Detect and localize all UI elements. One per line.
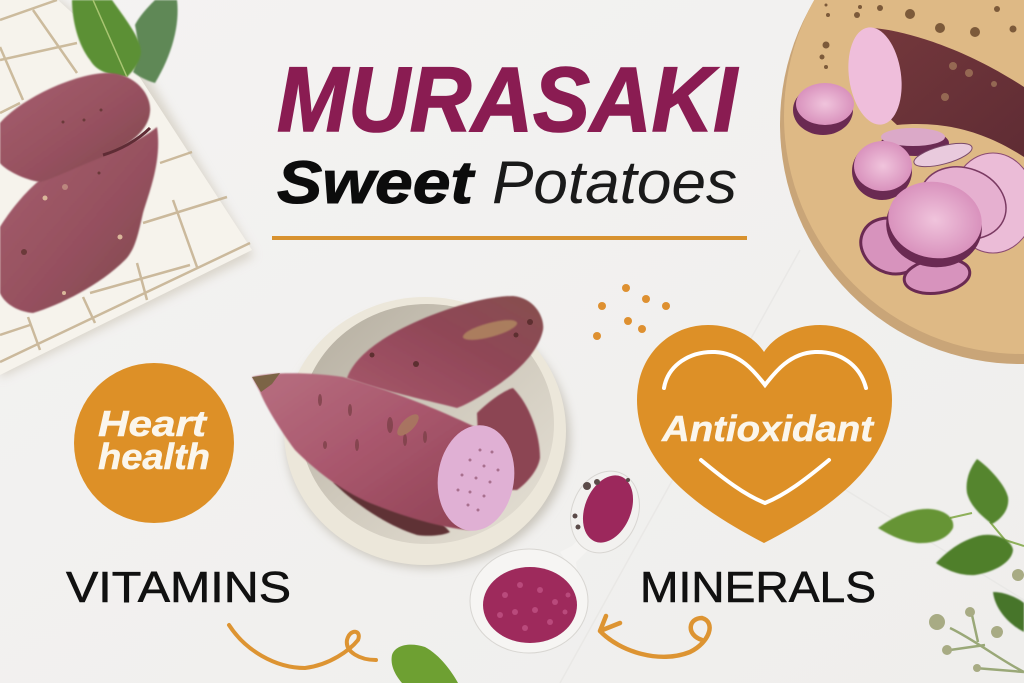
whole potato on board — [870, 28, 1024, 157]
right herb sprig — [878, 459, 1024, 672]
slices — [793, 83, 1024, 297]
heart health badge — [74, 363, 234, 523]
minerals label: MINERALS — [640, 563, 876, 612]
title: Sweet: Sweet — [277, 149, 476, 216]
upper left potato — [0, 73, 150, 182]
green leaf — [72, 0, 141, 77]
title underline — [272, 236, 747, 240]
upper potato — [347, 296, 543, 408]
vitamins label: VITAMINS — [66, 563, 291, 612]
title: Murasaki: MURASAKI — [277, 49, 739, 151]
antioxidant label: Antioxidant — [661, 408, 875, 449]
heart inner bottom line — [701, 460, 829, 503]
title — [277, 49, 739, 216]
grey-green leaf — [133, 0, 178, 83]
heart health badge: health — [98, 436, 210, 477]
bottom leaf — [392, 645, 458, 683]
title: Potatoes: Potatoes — [492, 149, 737, 216]
arrow: vitamins squiggle — [229, 625, 376, 668]
arrow: minerals pointing to spoon — [600, 616, 710, 657]
front potato — [252, 373, 477, 530]
heart health label: Heart — [98, 403, 208, 444]
lower left potato — [0, 127, 158, 313]
spoons with purple powder — [470, 461, 651, 653]
orange dots decoration — [593, 284, 670, 340]
heart inner top line — [664, 352, 866, 388]
antioxidant heart badge — [637, 325, 892, 543]
towel with potatoes and leaves — [0, 0, 254, 378]
cutting board with sliced potato — [780, 0, 1024, 364]
bowl with sweet potatoes — [252, 296, 570, 568]
rear potato — [477, 388, 540, 490]
